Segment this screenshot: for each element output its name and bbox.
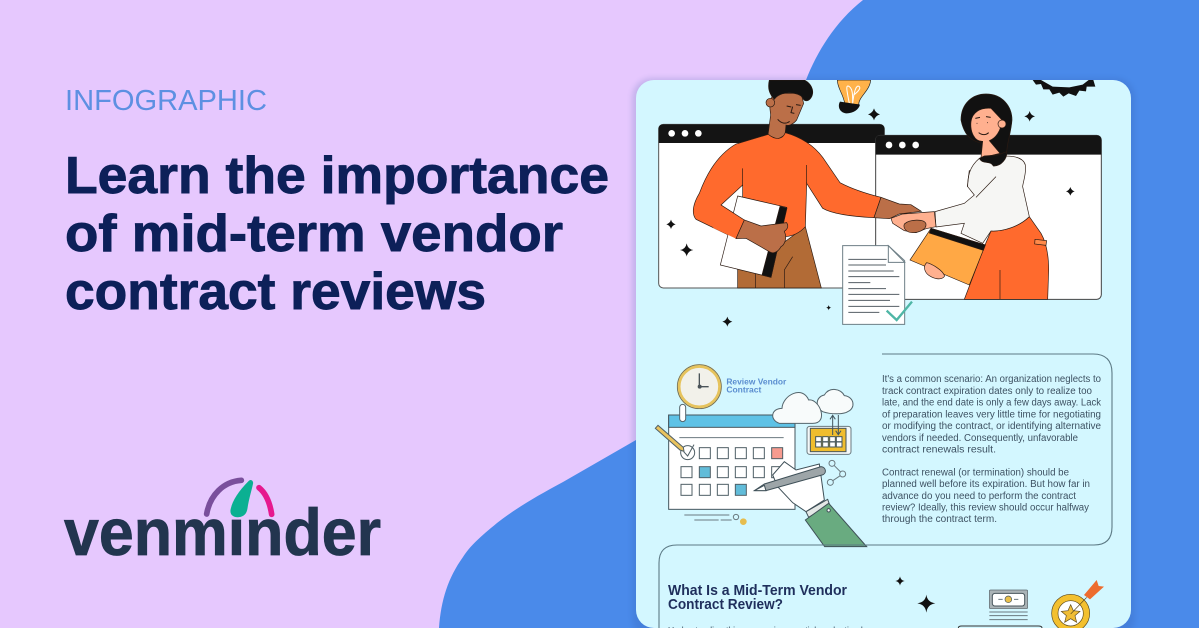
window: left: [659, 124, 884, 288]
intro text: vendors if needed. Consequently, unfavorable: [882, 433, 1079, 444]
title: contract reviews: [65, 263, 486, 321]
book: [720, 196, 787, 277]
section illustration: [895, 576, 1104, 628]
sparkles: [722, 108, 1035, 327]
intro text panel outline: [659, 354, 1112, 628]
section heading: [668, 584, 847, 609]
section heading: What Is a Mid-Term Vendor: [668, 583, 847, 599]
infographic preview card: [636, 80, 1131, 628]
intro text: of preparation leaves very little time for negotiating: [882, 410, 1101, 420]
section heading: Contract Review?: [668, 597, 783, 613]
clouds: [773, 389, 853, 423]
card shadow: [632, 78, 1135, 628]
window: right: [876, 135, 1101, 299]
calendar illustration: [655, 365, 867, 547]
medal with arrow: [1052, 580, 1104, 628]
intro text: planned well before its expiration. But how far in: [882, 479, 1090, 490]
intro text: track contract expiration dates only to realize too: [882, 386, 1093, 397]
title: of mid-term vendor: [65, 205, 563, 263]
gear: [1033, 80, 1095, 97]
blue blob: [439, 0, 1199, 628]
eyebrow label: INFOGRAPHIC: [65, 85, 267, 117]
handshake illustration: [659, 80, 1101, 327]
light bulb: [837, 80, 871, 113]
intro text: Contract renewal (or termination) should be: [882, 468, 1070, 478]
caption: Contract: [726, 385, 761, 395]
intro text: [882, 374, 1102, 525]
clock: [677, 365, 721, 409]
calendar: [655, 404, 795, 525]
hand with pen: [754, 462, 867, 547]
woman: [891, 94, 1049, 299]
intro text: It's a common scenario: An organization neglects to: [882, 374, 1102, 385]
intro text: late, and the end date is only a few days away. Lack: [882, 398, 1101, 408]
paper with check: [843, 246, 912, 324]
man: [693, 80, 921, 288]
intro text: review? Ideally, this review should occur halfway: [882, 502, 1089, 514]
caption: Review Vendor: [726, 376, 787, 386]
caption: [726, 378, 786, 392]
money stack: [958, 590, 1042, 628]
intro text: or modifying the contract, or identifying alternative: [882, 421, 1102, 432]
title: [65, 147, 609, 321]
data device: [807, 415, 851, 454]
network nodes: [827, 460, 846, 485]
venminder logo: venminder: [64, 495, 381, 569]
intro text: through the contract term.: [882, 514, 997, 525]
section sparkles: [895, 576, 935, 613]
intro text: contract renewals result.: [882, 444, 996, 456]
intro text: advance do you need to perform the contract: [882, 491, 1076, 502]
title: Learn the importance: [65, 147, 609, 205]
